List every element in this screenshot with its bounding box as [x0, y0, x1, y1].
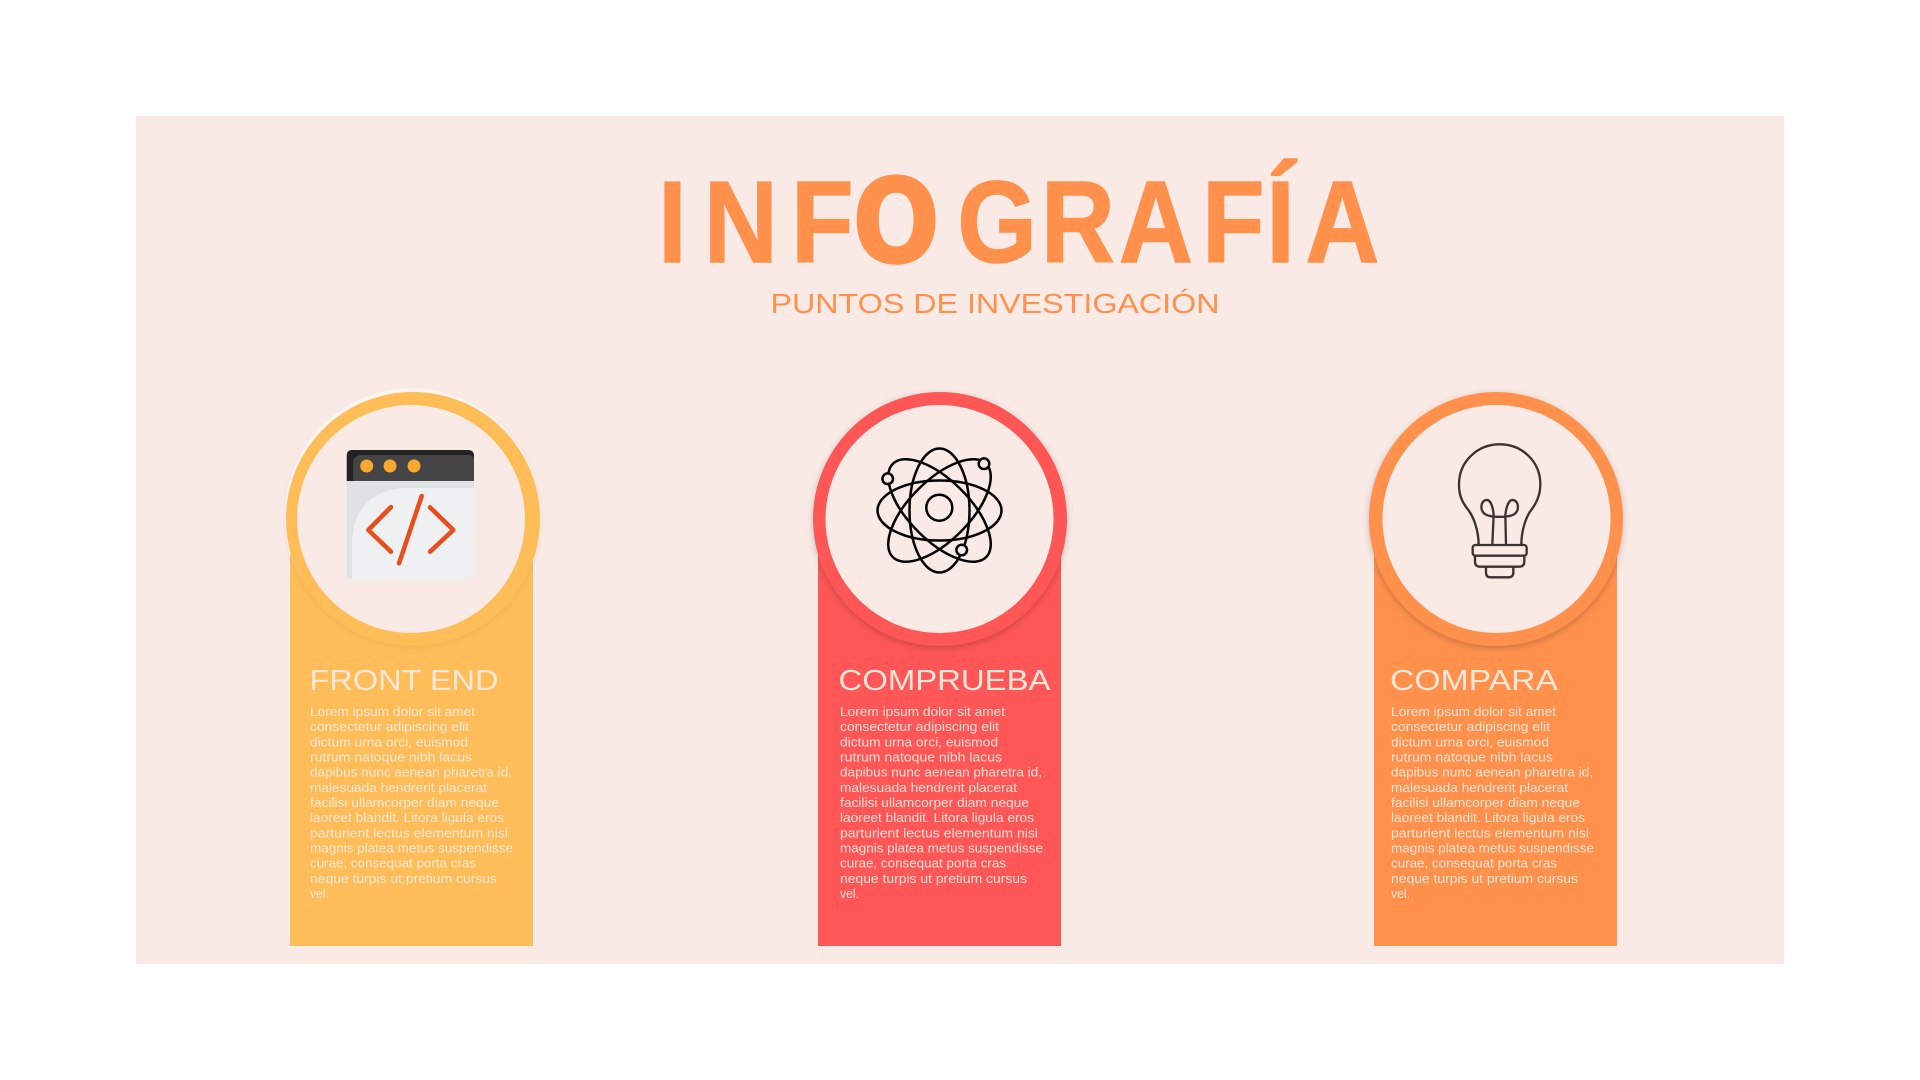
card bar: comprueba [818, 540, 1061, 946]
body text: compara: dictum urna orci, euismod [1391, 734, 1549, 749]
body text: front end: neque turpis ut pretium cursus [310, 871, 498, 886]
body text: comprueba: dapibus nunc aenean pharetra id, [840, 765, 1042, 780]
card bar: front end [290, 540, 533, 946]
body text: front end: vel. [310, 886, 329, 901]
body text: comprueba: rutrum natoque nibh lacus [840, 750, 1003, 764]
body text: comprueba: vel. [840, 886, 859, 901]
icon: light bulb [1459, 444, 1540, 577]
panel: compara [1369, 392, 1623, 946]
background panel [136, 116, 1784, 964]
body text: comprueba: consectetur adipiscing elit [840, 719, 999, 734]
body text: front end: laoreet blandit. Litora ligula eros [310, 810, 505, 825]
icon: code window [347, 450, 474, 579]
card bar: compara [1374, 540, 1617, 946]
icon: atom [872, 443, 1007, 578]
body text: front end [310, 704, 513, 901]
body text: front end: parturient lectus elementum nisi [310, 825, 508, 840]
panel: front end [284, 388, 540, 946]
body text: comprueba: malesuada hendrerit placerat [840, 780, 1017, 795]
body text: front end: curae, consequat porta cras [310, 856, 477, 871]
body text: front end: dictum urna orci, euismod [310, 734, 468, 749]
body text: compara: facilisi ullamcorper diam neque [1391, 795, 1580, 810]
body text: comprueba: curae, consequat porta cras [840, 856, 1007, 871]
body text: front end: rutrum natoque nibh lacus [310, 750, 473, 764]
heading: comprueba: COMPRUEBA [838, 665, 1051, 697]
body text: compara: laoreet blandit. Litora ligula eros [1391, 810, 1586, 825]
body text: compara [1391, 704, 1594, 901]
title: INFOGRAFÍA [658, 155, 1379, 290]
body text: comprueba [840, 704, 1043, 901]
body text: front end: malesuada hendrerit placerat [310, 780, 487, 795]
body text: comprueba: dictum urna orci, euismod [840, 734, 998, 749]
body text: comprueba: Lorem ipsum dolor sit amet [840, 704, 1005, 719]
circle badge: comprueba [813, 392, 1067, 646]
body text: front end: magnis platea metus suspendisse [310, 840, 513, 856]
body text: front end: Lorem ipsum dolor sit amet [310, 704, 475, 719]
body text: comprueba: neque turpis ut pretium cursus [840, 871, 1028, 886]
body text: compara: vel. [1391, 886, 1410, 901]
body text: comprueba: parturient lectus elementum nisi [840, 825, 1038, 840]
circle badge: compara [1369, 392, 1623, 646]
body text: front end: consectetur adipiscing elit [310, 719, 469, 734]
heading: front end: FRONT END [310, 665, 498, 697]
panel: comprueba [813, 392, 1067, 946]
body text: comprueba: magnis platea metus suspendisse [840, 840, 1043, 856]
heading: compara: COMPARA [1390, 665, 1559, 697]
body text: compara: neque turpis ut pretium cursus [1391, 871, 1579, 886]
body text: compara: parturient lectus elementum nisi [1391, 825, 1589, 840]
body text: compara: curae, consequat porta cras [1391, 856, 1558, 871]
body text: front end: dapibus nunc aenean pharetra id, [310, 765, 512, 780]
body text: compara: malesuada hendrerit placerat [1391, 780, 1568, 795]
body text: compara: Lorem ipsum dolor sit amet [1391, 704, 1556, 719]
body text: compara: consectetur adipiscing elit [1391, 719, 1550, 734]
circle badge: front end [284, 388, 540, 646]
body text: compara: dapibus nunc aenean pharetra id, [1391, 765, 1593, 780]
body text: comprueba: facilisi ullamcorper diam neque [840, 795, 1029, 810]
body text: compara: magnis platea metus suspendisse [1391, 840, 1594, 856]
body text: front end: facilisi ullamcorper diam neque [310, 795, 499, 810]
body text: comprueba: laoreet blandit. Litora ligula eros [840, 810, 1035, 825]
body text: compara: rutrum natoque nibh lacus [1391, 750, 1554, 764]
subtitle: PUNTOS DE INVESTIGACIÓN [770, 288, 1220, 319]
